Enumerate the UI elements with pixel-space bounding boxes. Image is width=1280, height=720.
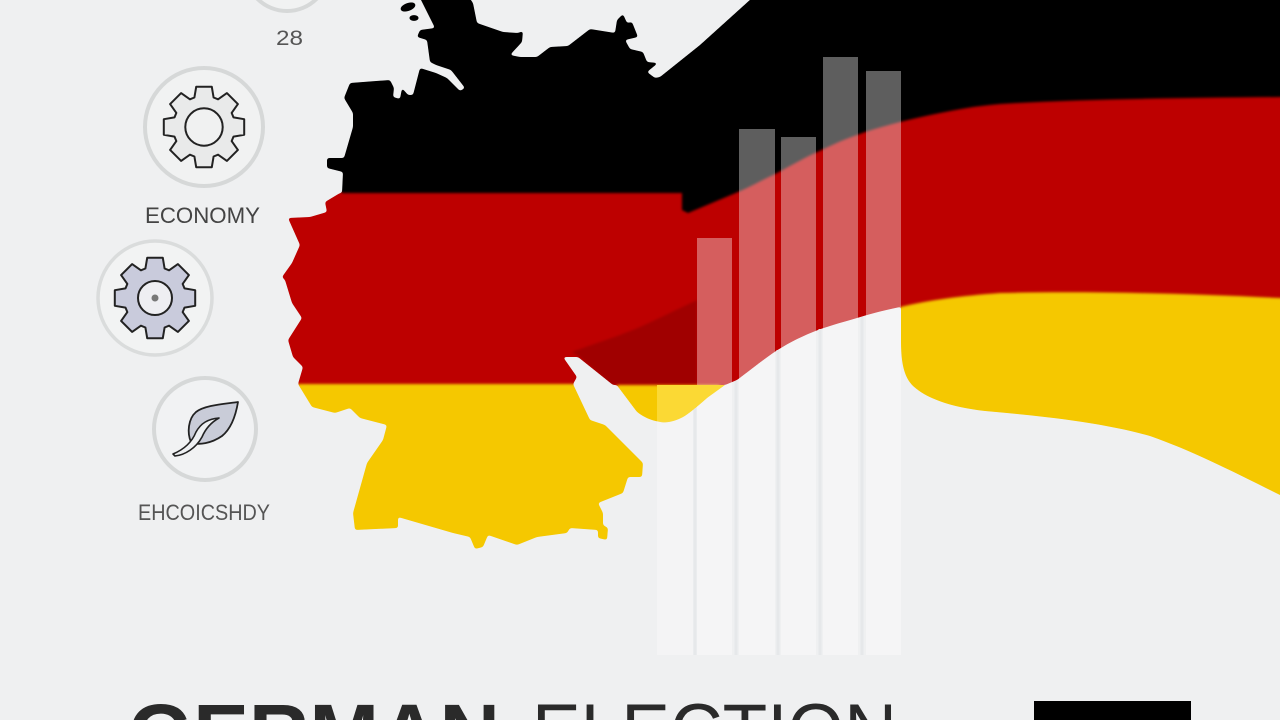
bar 3 <box>781 137 816 655</box>
label: 28: 28 <box>276 27 303 50</box>
label: economy: ECONOMY <box>145 203 260 228</box>
translucent bar chart overlay <box>657 57 901 655</box>
black band: northern map and flag wave <box>327 0 1280 213</box>
map of Germany merged with waving flag <box>282 0 1280 549</box>
bar 1 <box>697 238 732 655</box>
icon: economy gear <box>145 68 263 186</box>
bar gap shadows <box>695 317 862 655</box>
yellow band: southern map and flag wave <box>298 280 1280 549</box>
label: garbled caption: EHCOICSHDY <box>138 500 270 525</box>
black flag block bottom right <box>1034 701 1191 720</box>
bar 2 <box>739 129 775 655</box>
title <box>128 687 897 720</box>
bar 5 <box>866 71 901 655</box>
small Baltic islands <box>399 1 419 21</box>
red band: central map and flag wave <box>282 90 1280 385</box>
bar 4 <box>823 57 858 655</box>
light yellow sliver over bars <box>657 385 725 422</box>
bar 0 <box>657 387 693 655</box>
icon: leaf <box>154 378 256 480</box>
icon: partial top circle <box>245 0 329 11</box>
dark red fold in the flag <box>572 300 697 384</box>
icon: blue-grey gear <box>98 241 212 355</box>
